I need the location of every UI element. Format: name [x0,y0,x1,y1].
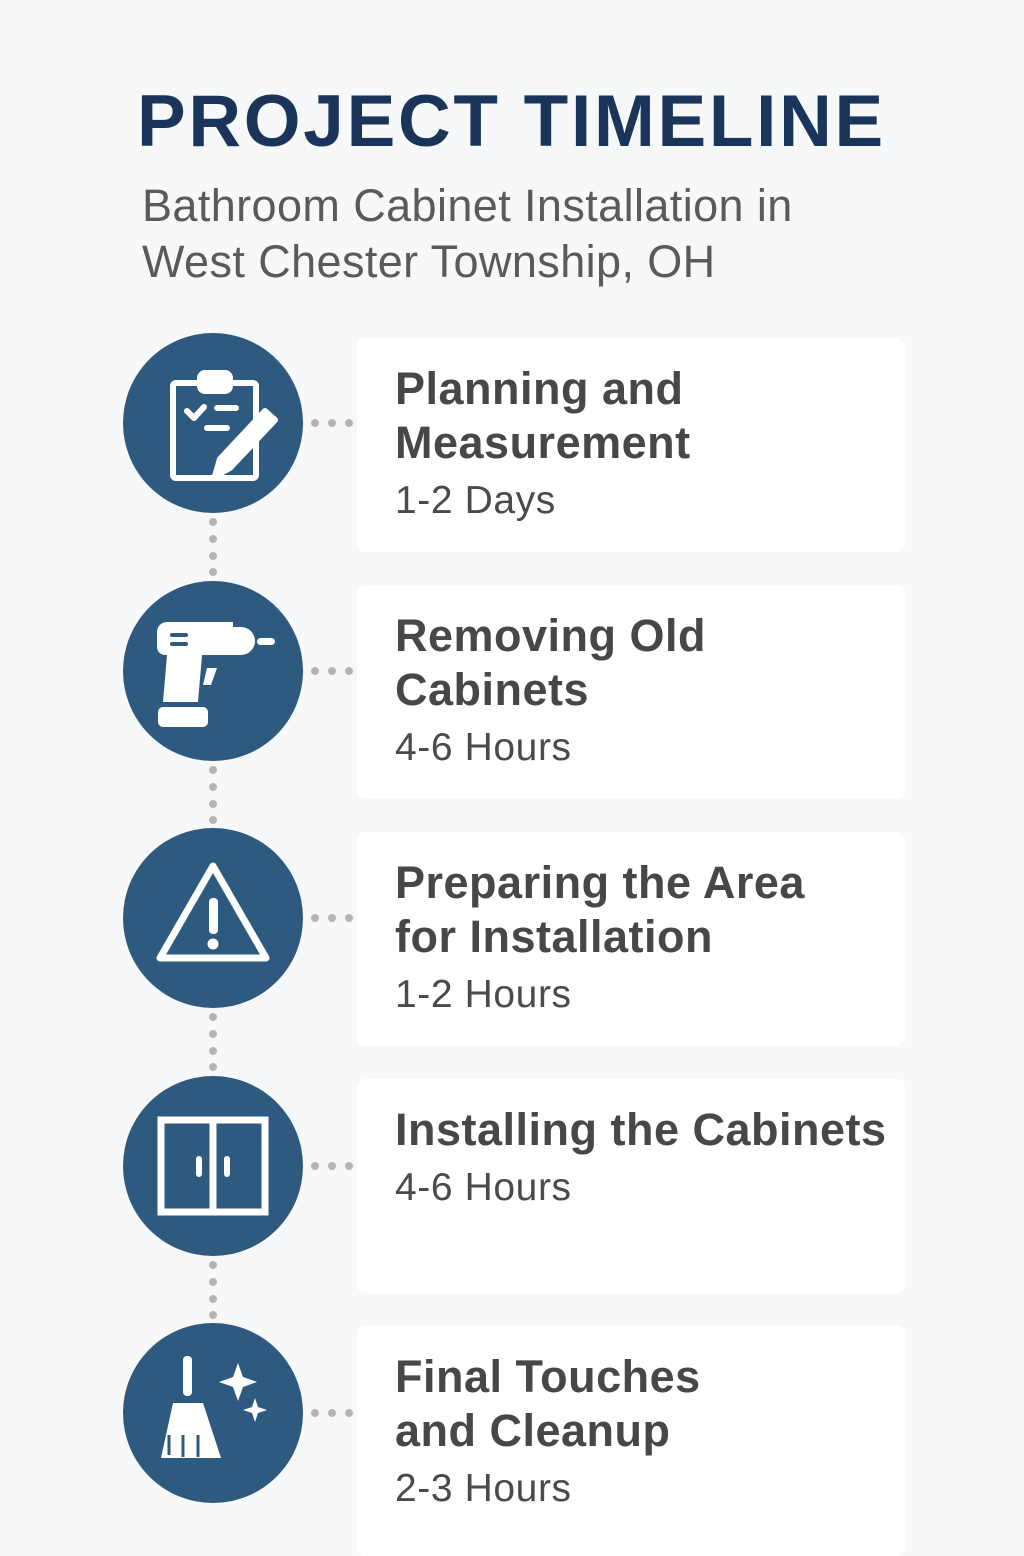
card 2: 4-6 Hours [395,726,572,769]
card 2: Cabinets [395,664,589,715]
subtitle: West Chester Township, OH [142,236,716,287]
subtitle: Bathroom Cabinet Installation in [142,180,793,231]
card 1 [357,338,905,552]
card 3: for Installation [395,911,713,962]
card 1: 1-2 Days [395,479,556,522]
icon: broom sparkle [123,1323,303,1503]
card 1: Measurement [395,417,691,468]
card 1: Planning and [395,363,684,414]
card 4: Installing the Cabinets [395,1104,887,1155]
icon: cabinet [123,1076,303,1256]
icon: warning [123,828,303,1008]
card 5: and Cleanup [395,1405,671,1456]
title: PROJECT TIMELINE [137,81,886,162]
subtitle [142,180,793,287]
card 2: Removing Old [395,610,706,661]
card 3 [357,832,905,1046]
card 4: 4-6 Hours [395,1166,572,1209]
icon: drill [123,581,303,761]
card 5: 2-3 Hours [395,1467,572,1510]
card 5 [357,1326,905,1556]
card 3: Preparing the Area [395,857,805,908]
card 2 [357,585,905,799]
icon: clipboard [123,333,303,513]
card 3: 1-2 Hours [395,973,572,1016]
card 4 [357,1079,905,1293]
card 5: Final Touches [395,1351,701,1402]
